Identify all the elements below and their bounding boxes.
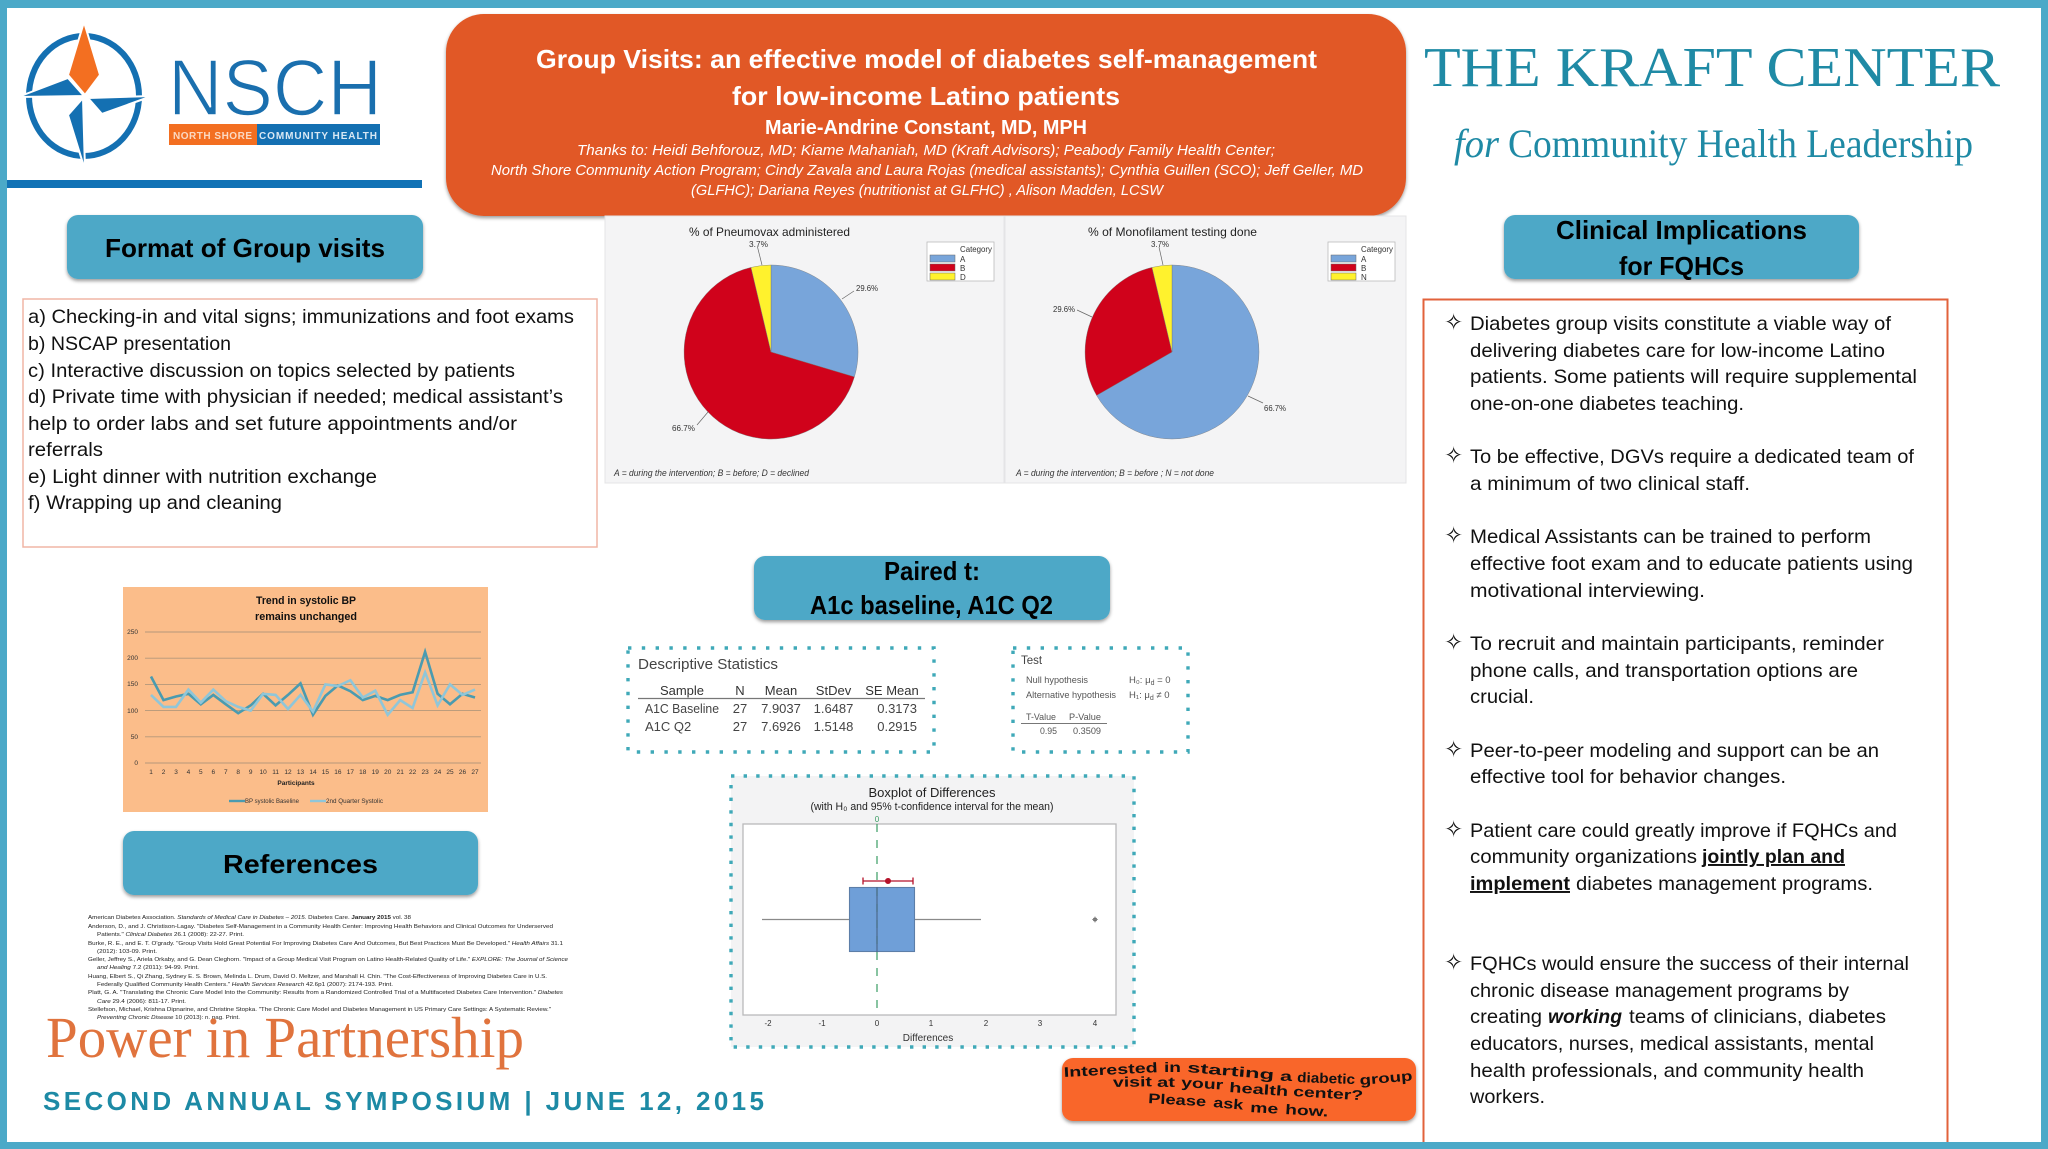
boxplot title: (with H₀ and 95% t-confidence interval for the mean)	[810, 801, 1054, 813]
table rows: 0.2915	[877, 719, 917, 734]
x axis labels: 7	[224, 769, 228, 776]
bullet: medical assistants	[1444, 523, 1913, 602]
callout: ask me how: at	[1157, 1074, 1175, 1090]
x axis labels: 18	[359, 769, 367, 776]
confidence interval	[863, 878, 913, 884]
pie chart: % of Pneumovax administered	[605, 216, 1004, 483]
legend	[229, 798, 384, 805]
boxplot title	[810, 785, 1054, 813]
bullet: working teams	[1444, 950, 1909, 1108]
logo tagline bar: COMMUNITY HEALTH	[259, 131, 377, 142]
bullet: jointly plan: jointly plan and	[1701, 846, 1845, 868]
bullet: recruit: ✧	[1444, 630, 1463, 656]
test values: 0.3509	[1073, 726, 1101, 737]
table rows: A1C Q2	[645, 719, 691, 734]
table header: Mean	[765, 683, 797, 698]
callout: ask me how: center?	[1293, 1083, 1364, 1103]
heading: Paired t: A1c baseline, A1C Q2	[810, 590, 1053, 620]
acknowledgements: Thanks to: Heidi Behforouz, MD; Kiame Mahaniah, MD (Kraft Advisors); Peabody Family Health Center;	[577, 143, 1275, 159]
x axis labels: 13	[297, 769, 304, 776]
chart footnote: A = during the intervention; B = before ; N = not done	[1015, 468, 1214, 478]
panel: format of group visits list	[23, 299, 597, 547]
plot area	[743, 824, 1116, 1015]
test values: T-Value	[1026, 712, 1056, 723]
test values: P-Value	[1069, 712, 1101, 723]
bullet: viable way: patients. Some patients will require supplemental	[1470, 366, 1917, 388]
icon: compass	[18, 22, 152, 170]
x axis labels: 25	[446, 769, 454, 776]
legend: B	[960, 264, 965, 273]
heading: Clinical Implications for FQHCs: Clinical Implications	[1556, 215, 1807, 245]
hypotheses: H₀: μ	[1129, 675, 1151, 686]
table header: Sample	[660, 683, 704, 698]
bullet: dedicated team	[1444, 443, 1915, 495]
slice labels: 66.7%	[672, 424, 695, 433]
bullet: working teams: chronic disease management programs by	[1470, 980, 1849, 1002]
chart title: % of Monofilament testing done	[1088, 225, 1257, 239]
hypotheses: = 0	[1154, 675, 1171, 686]
bullet: dedicated team: ✧	[1444, 443, 1463, 469]
y axis labels: 0	[134, 760, 138, 767]
callout: ask me how: starting	[1187, 1059, 1275, 1083]
hypotheses	[1026, 675, 1171, 702]
panel: format of group visits list: c) Interactive discussion on topics selected by patients	[28, 360, 515, 382]
chart footnote: A = during the intervention; B = before; D = declined	[613, 468, 810, 478]
y axis labels: 250	[127, 629, 138, 636]
x axis labels: 21	[397, 769, 404, 776]
bullet: viable way	[1444, 310, 1917, 415]
bullet: working teams: creating	[1470, 1006, 1542, 1028]
NSCH logo	[18, 22, 382, 170]
chart title	[255, 595, 357, 623]
table: test: Test	[1021, 655, 1043, 667]
hypothesis line	[876, 824, 878, 1015]
callout: ask me how: your	[1181, 1074, 1224, 1093]
callout: ask me how: group	[1359, 1067, 1413, 1088]
x axis labels	[149, 769, 479, 776]
slice labels: 3.7%	[1151, 240, 1169, 249]
bullet: working teams: ✧	[1444, 950, 1463, 976]
table header: SE Mean	[865, 683, 919, 698]
heading: Clinical Implications for FQHCs: for FQHCs	[1619, 251, 1744, 281]
x axis labels: 15	[322, 769, 329, 776]
x axis labels: 11	[272, 769, 279, 776]
callout: ask me how	[1062, 1058, 1416, 1121]
x axis labels: 9	[249, 769, 253, 776]
slice labels	[672, 240, 878, 433]
table rows	[645, 701, 917, 734]
y axis labels: 100	[127, 708, 138, 715]
chart title: remains unchanged	[255, 611, 357, 623]
references list: American Diabetes Association. Standards of Medical Care in Diabetes – 2015. Diabetes Care. January 2015 vol. 38	[88, 915, 412, 921]
x axis labels: 24	[434, 769, 442, 776]
bullet: peer-to-peer: effective tool for behavior changes.	[1470, 766, 1786, 788]
bullet: jointly plan: implement	[1470, 873, 1571, 895]
hypotheses: d	[1151, 680, 1155, 687]
references list: Anderson, D., and J. Christison-Lagay. "Diabetes Self-Management in a Community Health Center: Improving Health Behaviors and Clinical Outcomes for Underserved	[88, 924, 553, 930]
x axis labels: 8	[236, 769, 240, 776]
references list: Federally Qualified Community Health Centers." Health Services Research 42.6p1 (2007): 2174-193. Print.	[97, 982, 393, 988]
heading: Paired t	[754, 556, 1110, 620]
legend: D	[960, 273, 966, 282]
bullet: viable way: delivering diabetes care for low-income Latino	[1470, 340, 1885, 362]
Kraft Center logo: Community Health Leadership	[1508, 121, 1973, 166]
bullet: medical assistants: Medical Assistants can be trained to perform	[1470, 526, 1871, 548]
slice labels	[1053, 240, 1286, 413]
bullet: jointly plan: community organizations	[1470, 846, 1697, 868]
chart title: % of Pneumovax administered	[689, 225, 850, 239]
x axis labels: 20	[384, 769, 392, 776]
x axis labels: 4	[187, 769, 191, 776]
references list: (2012): 103-09. Print.	[97, 949, 157, 955]
legend: Category	[960, 245, 992, 254]
heading: Format of Group visits: Format of Group visits	[105, 233, 385, 263]
panel: format of group visits list: e) Light dinner with nutrition exchange	[28, 466, 377, 488]
table rows: 1.6487	[814, 701, 853, 716]
bullet: recruit	[1444, 630, 1885, 708]
references list: and Healing 7.2 (2011): 94-99. Print.	[97, 965, 199, 971]
median	[876, 887, 878, 952]
y axis labels: 50	[131, 734, 138, 741]
logo tagline bar	[169, 124, 380, 145]
table rows: 1.5148	[814, 719, 853, 734]
callout: ask me how: health	[1229, 1079, 1289, 1099]
bullet: working teams: working	[1548, 1006, 1622, 1028]
null hypothesis label: 0	[875, 815, 880, 824]
hypotheses: H₁: μ	[1129, 690, 1150, 701]
references list: Huang, Elbert S., Qi Zhang, Sydney E. S. Brown, Melinda L. Drum, David O. Meltzer, and Marshall H. Chin. "The Cost-Effectiveness of Improving Diabetes Care in U.S.	[88, 974, 547, 980]
y axis labels: 200	[127, 655, 138, 662]
heading: References	[123, 831, 478, 895]
outlier	[1092, 916, 1098, 922]
boxplot title: Boxplot of Differences	[869, 785, 996, 800]
callout: ask me how: diabetic	[1297, 1069, 1356, 1087]
references list: Geller, Jeffrey S., Ariela Orkaby, and G. Dean Cleghorn. "Impact of a Group Medical Visit Program on Latino Health-Related Quality of Life." EXPLORE: The Journal of Science	[88, 957, 569, 963]
x axis labels: 3	[174, 769, 178, 776]
author: Marie-Andrine Constant, MD, MPH	[765, 117, 1087, 139]
acknowledgements: North Shore Community Action Program; Cindy Zavala and Laura Rojas (medical assistants); Cynthia Guillen (SCO); Jeff Geller, MD	[491, 163, 1363, 179]
x axis labels: 17	[347, 769, 354, 776]
bullet: medical assistants: ✧	[1444, 523, 1463, 549]
axis labels: 4	[1093, 1019, 1098, 1028]
references list: Preventing Chronic Disease 10 (2013): n. pag. Print.	[97, 1015, 240, 1021]
Kraft Center logo: for	[1454, 121, 1499, 166]
heading: Paired t: Paired t:	[884, 556, 980, 586]
x axis labels: 22	[409, 769, 417, 776]
bullet: jointly plan	[1444, 817, 1897, 895]
bullet: viable way: ✧	[1444, 310, 1463, 336]
table: test	[1013, 648, 1188, 752]
panel: format of group visits list: b) NSCAP presentation	[28, 333, 231, 355]
callout: ask me how: a	[1280, 1068, 1292, 1084]
references list: Platt, G. A. "Translating the Chronic Care Model Into the Community: Results from a Randomized Controlled Trial of a Multifaceted Diabetes Care Intervention." Diabetes	[88, 990, 563, 996]
chart title: Trend in systolic BP	[256, 595, 356, 607]
slice labels: 3.7%	[749, 240, 768, 249]
panel: clinical implications	[1424, 300, 1948, 1149]
table rows: A1C Baseline	[645, 701, 719, 716]
logo wordmark: NSCH	[168, 43, 382, 132]
panel: format of group visits list: a) Checking-in and vital signs; immunizations and foot exams	[28, 306, 574, 328]
legend: 2nd Quarter Systolic	[326, 798, 384, 805]
bullet: peer-to-peer	[1444, 737, 1879, 788]
panel: format of group visits list: help to order labs and set future appointments and/or	[28, 413, 518, 435]
legend	[927, 242, 994, 282]
bullet: medical assistants: effective foot exam and to educate patients using	[1470, 553, 1913, 575]
table: descriptive statistics	[628, 648, 934, 752]
x axis labels: 27	[471, 769, 479, 776]
acknowledgements: (GLFHC); Dariana Reyes (nutritionist at GLFHC) , Alison Madden, LCSW	[691, 183, 1164, 199]
bullet: medical assistants: motivational interviewing.	[1470, 580, 1705, 602]
test values	[1021, 712, 1107, 737]
bullet: working teams: educators, nurses, medical assistants, mental	[1470, 1033, 1874, 1055]
bullet: working teams: health professionals, and community health	[1470, 1060, 1864, 1082]
pie slices	[1085, 265, 1259, 439]
references list: Care 29.4 (2006): 811-17. Print.	[97, 999, 186, 1005]
bullet: viable way: Diabetes group visits constitute a viable way of	[1470, 313, 1892, 335]
axis labels: -2	[764, 1019, 772, 1028]
bullet: working teams: FQHCs would ensure the success of their internal	[1470, 953, 1909, 975]
line chart: trend in systolic BP	[123, 587, 488, 812]
panel: format of group visits list: d) Private time with physician if needed; medical assistant’s	[28, 386, 563, 408]
x axis labels: 6	[211, 769, 215, 776]
legend: B	[1361, 264, 1366, 273]
x axis labels: 14	[309, 769, 317, 776]
references list: Stellefson, Michael, Krishna Dipnarine, and Christine Stopka. "The Chronic Care Model and Diabetes Management in US Primary Care Settings: A Systematic Review."	[88, 1007, 551, 1013]
Kraft Center logo	[1424, 37, 2001, 166]
x axis labels: 23	[421, 769, 429, 776]
table rows: 7.9037	[761, 701, 801, 716]
hypotheses: ≠ 0	[1154, 690, 1170, 701]
main title: for low-income Latino patients	[732, 81, 1120, 111]
pie chart: % of Monofilament testing done	[1005, 216, 1406, 483]
title banner	[446, 14, 1406, 216]
whiskers	[762, 918, 981, 920]
references list: Patients." Clinical Diabetes 26.1 (2008): 22-27. Print.	[97, 932, 244, 938]
Kraft Center logo: THE KRAFT CENTER	[1424, 37, 2001, 99]
x axis labels: 10	[259, 769, 267, 776]
bullet: working teams: teams of clinicians, diabetes	[1629, 1006, 1886, 1028]
axis title: Differences	[903, 1033, 953, 1044]
x axis labels: 1	[149, 769, 153, 776]
x axis labels: 19	[372, 769, 379, 776]
x axis labels: 12	[284, 769, 292, 776]
axis labels: 1	[929, 1019, 934, 1028]
references list	[88, 915, 569, 1021]
x axis labels: 2	[162, 769, 166, 776]
main title: Group Visits: an effective model of diabetes self-management	[536, 44, 1317, 74]
x axis labels: 5	[199, 769, 203, 776]
x axis labels: 26	[459, 769, 466, 776]
callout: ask me how: Please	[1148, 1090, 1207, 1109]
legend: Category	[1361, 245, 1393, 254]
table rows: 0.3173	[877, 701, 917, 716]
bullet: peer-to-peer: ✧	[1444, 737, 1463, 763]
legend	[1328, 242, 1395, 282]
callout: ask me how: ask	[1213, 1094, 1244, 1113]
legend: A	[960, 255, 966, 264]
bullet: recruit: To recruit and maintain participants, reminder	[1470, 633, 1885, 655]
bullet: jointly plan: ✧	[1444, 817, 1463, 843]
x axis labels: 16	[334, 769, 342, 776]
box	[850, 888, 914, 952]
pie slices	[684, 265, 858, 439]
table header: N	[735, 683, 745, 698]
bullet: viable way: one-on-one diabetes teaching.	[1470, 393, 1744, 415]
symposium date line: SECOND ANNUAL SYMPOSIUM | JUNE 12, 2015	[43, 1086, 764, 1116]
bullet: dedicated team: To be effective, DGVs require a dedicated team of	[1470, 446, 1915, 468]
y axis labels	[127, 629, 138, 767]
panel: format of group visits list: referrals	[28, 439, 103, 461]
callout: ask me how: how.	[1285, 1101, 1329, 1120]
panel: format of group visits list: f) Wrapping up and cleaning	[28, 492, 282, 514]
slice labels: 29.6%	[1053, 305, 1075, 314]
slice labels: 29.6%	[856, 284, 878, 293]
test values: 0.95	[1040, 726, 1057, 737]
x axis title: Participants	[277, 780, 315, 787]
callout: ask me how: me	[1250, 1099, 1279, 1117]
heading: Clinical Implications for FQHCs	[1504, 215, 1859, 281]
heading: References: References	[223, 849, 378, 879]
callout: ask me how: Interested	[1063, 1059, 1158, 1080]
series: 2nd quarter systolic	[151, 672, 475, 715]
bullet: dedicated team: a minimum of two clinical staff.	[1470, 473, 1750, 495]
legend: A	[1361, 255, 1367, 264]
table: descriptive statistics: Descriptive Statistics	[638, 656, 778, 673]
table header	[660, 683, 919, 698]
slice labels: 66.7%	[1264, 404, 1286, 413]
hypotheses: d	[1150, 695, 1154, 702]
logo tagline bar: NORTH SHORE	[173, 131, 252, 142]
callout: ask me how: visit	[1113, 1073, 1153, 1090]
table rows: 27	[733, 719, 747, 734]
bullet: recruit: crucial.	[1470, 686, 1534, 708]
legend: BP systolic Baseline	[245, 798, 299, 805]
bullet: jointly plan: Patient care could greatly improve if FQHCs and	[1470, 820, 1897, 842]
table rows: 27	[733, 701, 747, 716]
references list: Burke, R. E., and E. T. O'grady. "Group Visits Hold Great Potential For Improving Diabetes Care And Outcomes, But Best Practices Must Be Developed." Health Affairs 31.1	[88, 941, 563, 947]
axis labels: 2	[984, 1019, 989, 1028]
axis labels	[764, 1019, 1098, 1028]
table rows: 7.6926	[761, 719, 801, 734]
axis labels: 0	[875, 1019, 880, 1028]
bullet: working teams: workers.	[1469, 1086, 1545, 1108]
legend: N	[1361, 273, 1367, 282]
bullet: recruit: phone calls, and transportation options are	[1470, 660, 1858, 682]
heading: Format of Group visits	[67, 215, 423, 279]
boxplot of differences	[731, 776, 1134, 1047]
hypotheses: Null hypothesis	[1026, 675, 1088, 686]
Power in Partnership wordmark: Power in Partnership	[46, 1005, 524, 1070]
bullet: jointly plan: diabetes management programs.	[1576, 873, 1873, 895]
axis labels: -1	[818, 1019, 826, 1028]
table header: StDev	[816, 683, 852, 698]
axis labels: 3	[1038, 1019, 1043, 1028]
acknowledgements	[491, 143, 1363, 199]
y axis labels: 150	[127, 681, 138, 688]
series: BP systolic baseline	[151, 652, 475, 715]
bullet: peer-to-peer: Peer-to-peer modeling and support can be an	[1470, 740, 1879, 762]
main title	[536, 44, 1317, 111]
hypotheses: Alternative hypothesis	[1026, 690, 1116, 701]
callout: ask me how: in	[1164, 1059, 1181, 1075]
